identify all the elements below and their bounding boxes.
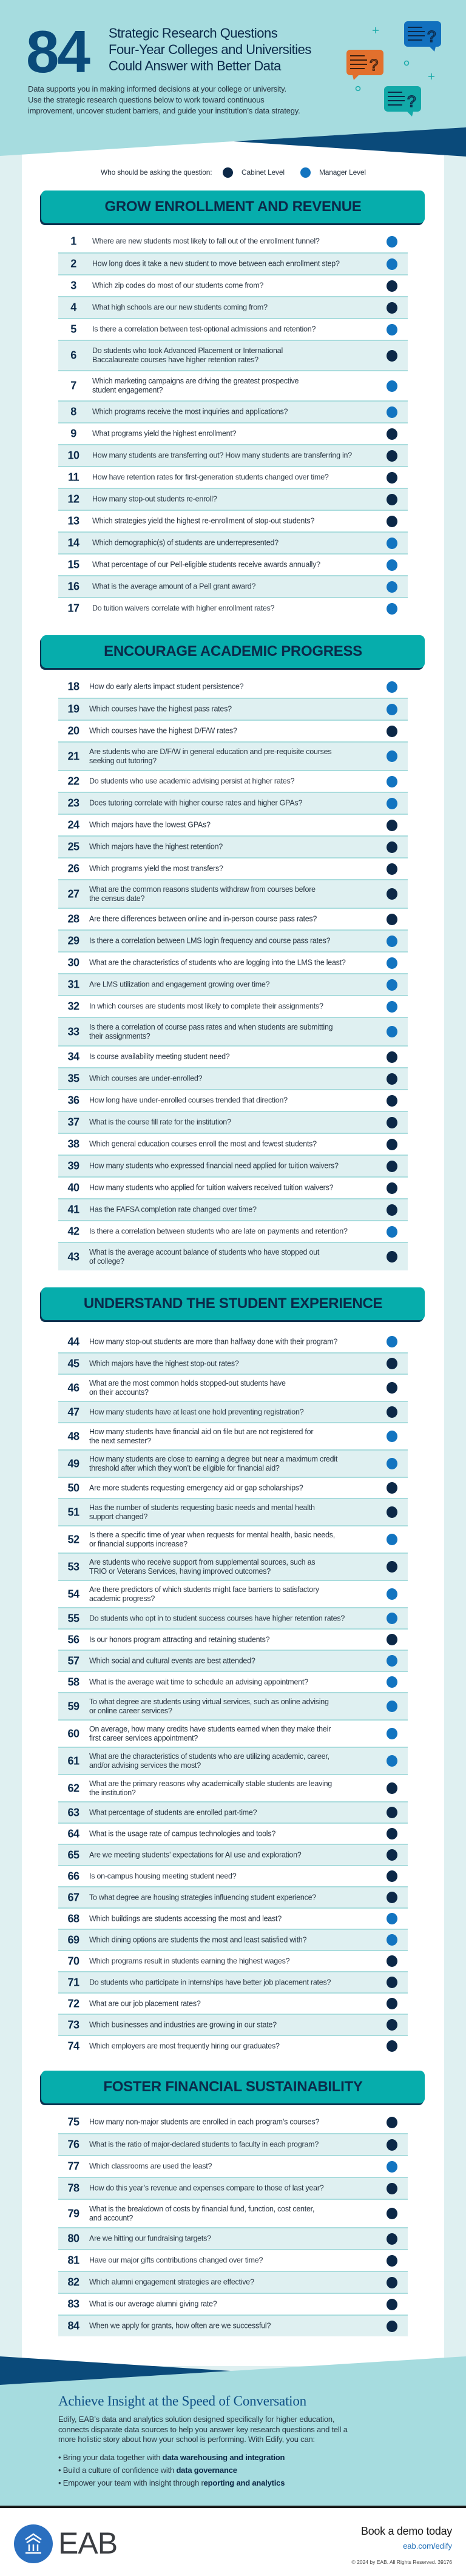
panel: enrollment questions: How long does it take a new student to move between each enrollment step? bbox=[92, 260, 340, 268]
panel: academic progress questions: Are there differences between online and in-person course pass rates? bbox=[89, 915, 317, 923]
intro paragraph: improvement, uncover student barriers, and guide your institution’s data strategy. bbox=[28, 106, 300, 115]
callout paragraph: connects disparate data sources to help you answer key research questions and tell a bbox=[58, 2424, 348, 2434]
panel: student experience questions: threshold after which they won’t be eligible for financial aid? bbox=[89, 1463, 280, 1472]
panel: academic progress questions: their assignments? bbox=[89, 1031, 150, 1040]
heading: encourage academic progress: ENCOURAGE ACADEMIC PROGRESS bbox=[104, 643, 362, 659]
panel: enrollment questions: 4 bbox=[70, 301, 76, 313]
panel: student experience questions: What are our job placement rates? bbox=[89, 1999, 201, 2008]
panel: student experience questions: On average, how many credits have students earned when they make their bbox=[89, 1724, 331, 1733]
icon: speech bubbles: ? bbox=[427, 27, 436, 46]
panel: financial questions: When we apply for grants, how often are we successful? bbox=[89, 2321, 271, 2330]
panel: academic progress questions: 21 bbox=[67, 750, 79, 762]
panel: student experience questions: 67 bbox=[67, 1891, 79, 1903]
panel: student experience questions: Which majors have the highest stop-out rates? bbox=[89, 1359, 239, 1367]
panel: financial questions: 75 bbox=[67, 2116, 79, 2128]
title: Could Answer with Better Data bbox=[109, 58, 281, 73]
panel: academic progress questions: seeking out tutoring? bbox=[89, 756, 157, 764]
panel: academic progress questions: 41 bbox=[67, 1204, 79, 1216]
legend: Manager Level bbox=[319, 168, 366, 177]
panel: financial questions: How do this year’s revenue and expenses compare to those of last year? bbox=[89, 2184, 323, 2193]
panel: student experience questions: 68 bbox=[67, 1912, 79, 1924]
panel: financial questions: Are we hitting our fundraising targets? bbox=[89, 2234, 211, 2242]
panel: student experience questions: TRIO or Veterans Services, having improved outcomes? bbox=[89, 1566, 271, 1575]
callout paragraph: more holistic story about how your school is performing. With Edify, you can: bbox=[58, 2435, 315, 2444]
panel: academic progress questions: Which courses are under-enrolled? bbox=[89, 1074, 202, 1082]
panel: academic progress questions: Which majors have the highest retention? bbox=[89, 842, 223, 851]
panel: student experience questions: 58 bbox=[67, 1676, 79, 1688]
panel: enrollment questions: 11 bbox=[68, 471, 79, 483]
panel: academic progress questions: 19 bbox=[67, 703, 79, 715]
callout bullets: • Build a culture of confidence with data governance bbox=[58, 2466, 237, 2474]
panel: student experience questions: What are the most common holds stopped-out students have bbox=[89, 1378, 286, 1387]
panel: student experience questions: Which dining options are students the most and least satisfied with? bbox=[89, 1935, 306, 1944]
panel: student experience questions: What are the characteristics of students who are utilizing academic, career, bbox=[89, 1752, 329, 1761]
panel: student experience questions: What is the usage rate of campus technologies and tools? bbox=[89, 1829, 275, 1838]
panel: enrollment questions: 10 bbox=[67, 449, 79, 461]
panel: academic progress questions: 43 bbox=[67, 1250, 79, 1263]
panel: student experience questions: on their accounts? bbox=[89, 1388, 149, 1397]
panel: academic progress questions: 24 bbox=[67, 819, 79, 831]
panel: student experience questions: 60 bbox=[67, 1727, 79, 1739]
panel: academic progress questions: 42 bbox=[67, 1226, 79, 1238]
panel: enrollment questions: student engagement? bbox=[92, 386, 163, 394]
panel: student experience questions: 73 bbox=[67, 2018, 79, 2031]
panel: enrollment questions: 3 bbox=[70, 279, 76, 291]
panel: financial questions: 79 bbox=[67, 2207, 79, 2219]
panel: academic progress questions: Is course availability meeting student need? bbox=[89, 1052, 230, 1060]
panel: academic progress questions: How long have under-enrolled courses trended that direction? bbox=[89, 1096, 288, 1104]
panel: academic progress questions: 30 bbox=[67, 956, 79, 968]
panel: student experience questions: Are more students requesting emergency aid or gap scholarships? bbox=[89, 1483, 303, 1492]
panel: academic progress questions: 35 bbox=[67, 1073, 79, 1085]
panel: student experience questions: first career services appointment? bbox=[89, 1734, 198, 1742]
panel: financial questions: 82 bbox=[67, 2276, 79, 2288]
panel: academic progress questions: 20 bbox=[67, 724, 79, 737]
panel: student experience questions: Are we meeting students’ expectations for AI use and exploration? bbox=[89, 1850, 301, 1859]
panel: academic progress questions: 23 bbox=[67, 797, 79, 809]
panel: academic progress questions: What are the characteristics of students who are logging into the LMS the least? bbox=[89, 959, 346, 967]
call to action: Book a demo today bbox=[361, 2525, 452, 2537]
panel: academic progress questions: Is there a correlation between LMS login frequency and course pass rates? bbox=[89, 937, 330, 945]
intro paragraph bbox=[28, 84, 300, 115]
legend bbox=[101, 167, 366, 178]
panel: student experience questions: 64 bbox=[67, 1827, 79, 1839]
callout bullets: • Bring your data together with data warehousing and integration bbox=[58, 2452, 285, 2462]
panel: student experience questions: Is there a specific time of year when requests for mental health, basic needs, bbox=[89, 1530, 335, 1539]
callout paragraph: Edify, EAB’s data and analytics solution designed specifically for higher education, bbox=[58, 2415, 334, 2424]
panel: enrollment questions: Which programs receive the most inquiries and applications? bbox=[92, 408, 288, 416]
panel: academic progress questions: Which majors have the lowest GPAs? bbox=[89, 820, 211, 829]
panel: student experience questions: 50 bbox=[67, 1482, 79, 1494]
heading: understand the student experience bbox=[41, 1287, 425, 1320]
panel: academic progress questions: 37 bbox=[67, 1116, 79, 1128]
big number 84: 84 bbox=[26, 18, 89, 85]
panel: enrollment questions: 1 bbox=[70, 235, 76, 248]
panel: academic progress questions: Has the FAFSA completion rate changed over time? bbox=[89, 1205, 257, 1213]
panel: academic progress questions: 18 bbox=[67, 681, 79, 693]
panel: enrollment questions: 6 bbox=[70, 349, 76, 362]
panel: academic progress questions: the census date? bbox=[89, 894, 144, 903]
panel: enrollment questions bbox=[58, 235, 408, 615]
panel: academic progress questions: In which courses are students most likely to complete their assignments? bbox=[89, 1002, 323, 1011]
panel: student experience questions: Which buildings are students accessing the most and least? bbox=[89, 1914, 282, 1923]
panel: academic progress questions: 26 bbox=[67, 863, 79, 875]
panel: financial questions: and account? bbox=[89, 2213, 133, 2222]
panel: student experience questions: 62 bbox=[67, 1782, 79, 1794]
panel: enrollment questions: 7 bbox=[70, 380, 76, 392]
panel: academic progress questions: 33 bbox=[67, 1025, 79, 1037]
panel: student experience questions: Are students who receive support from supplemental sources, such as bbox=[89, 1558, 315, 1566]
panel: enrollment questions: 5 bbox=[70, 323, 76, 335]
legend: Who should be asking the question: bbox=[101, 168, 212, 177]
panel: academic progress questions: Which courses have the highest pass rates? bbox=[89, 705, 232, 713]
call to action: eab.com/edify bbox=[403, 2541, 452, 2551]
panel: enrollment questions: 9 bbox=[70, 427, 76, 439]
title: Four-Year Colleges and Universities bbox=[109, 42, 311, 57]
title: Strategic Research Questions bbox=[109, 25, 277, 41]
panel: enrollment questions: Do students who took Advanced Placement or International bbox=[92, 346, 283, 355]
panel: student experience questions: 61 bbox=[67, 1755, 79, 1767]
panel: academic progress questions: 22 bbox=[67, 775, 79, 787]
panel: student experience questions: 44 bbox=[67, 1335, 79, 1347]
panel: student experience questions: Which businesses and industries are growing in our state? bbox=[89, 2020, 277, 2029]
panel: student experience questions: What are the primary reasons why academically stable students are leaving bbox=[89, 1779, 332, 1787]
panel: academic progress questions: Do students who use academic advising persist at higher rates? bbox=[89, 777, 294, 785]
panel: enrollment questions: 17 bbox=[67, 602, 79, 614]
panel: student experience questions: 49 bbox=[67, 1457, 79, 1469]
logo: EAB bbox=[14, 2524, 117, 2563]
panel: student experience questions: Which employers are most frequently hiring our graduates? bbox=[89, 2042, 280, 2050]
icon: speech bubbles: ? bbox=[407, 92, 416, 110]
panel: enrollment questions: 2 bbox=[70, 257, 76, 269]
panel: student experience questions: the next semester? bbox=[89, 1437, 151, 1445]
panel: academic progress questions: Are students who are D/F/W in general education and pre-requisite courses bbox=[89, 747, 331, 756]
panel: academic progress questions: What is the average account balance of students who have stopped out bbox=[89, 1247, 319, 1256]
panel: academic progress questions: 36 bbox=[67, 1094, 79, 1107]
heading: encourage academic progress bbox=[41, 635, 425, 668]
panel: student experience questions: Has the number of students requesting basic needs and mental health bbox=[89, 1503, 315, 1512]
panel: enrollment questions: 8 bbox=[70, 405, 76, 417]
panel: financial questions: Which alumni engagement strategies are effective? bbox=[89, 2278, 254, 2286]
panel: academic progress questions: of college? bbox=[89, 1257, 124, 1266]
panel: student experience questions: How many stop-out students are more than halfway done with their program? bbox=[89, 1337, 337, 1346]
callout bullets: • Empower your team with insight through reporting and analytics bbox=[58, 2478, 285, 2487]
legend: Cabinet Level bbox=[241, 168, 285, 177]
panel: student experience questions: 70 bbox=[67, 1955, 79, 1967]
panel: financial questions: 76 bbox=[67, 2138, 79, 2150]
panel: student experience questions: support changed? bbox=[89, 1512, 147, 1520]
panel: academic progress questions: 28 bbox=[67, 912, 79, 925]
panel: enrollment questions: 15 bbox=[67, 558, 79, 570]
white content panel bbox=[22, 121, 444, 2366]
panel: financial questions: 80 bbox=[67, 2233, 79, 2245]
panel: enrollment questions: How many stop-out students re-enroll? bbox=[92, 495, 217, 504]
panel: enrollment questions: How have retention rates for first-generation students changed over time? bbox=[92, 473, 329, 482]
panel: academic progress questions: 32 bbox=[67, 1000, 79, 1012]
panel: enrollment questions: 12 bbox=[67, 493, 79, 505]
panel: financial questions: Which classrooms are used the least? bbox=[89, 2162, 212, 2171]
panel: enrollment questions: 14 bbox=[67, 536, 79, 548]
heading: grow enrollment and revenue: GROW ENROLLMENT AND REVENUE bbox=[104, 198, 362, 215]
panel: academic progress questions: Are LMS utilization and engagement growing over time? bbox=[89, 980, 269, 989]
panel: student experience questions: Which social and cultural events are best attended? bbox=[89, 1656, 255, 1665]
footer white band bbox=[0, 2508, 466, 2576]
panel: academic progress questions: Which programs yield the most transfers? bbox=[89, 864, 223, 872]
heading: foster financial sustainability: FOSTER FINANCIAL SUSTAINABILITY bbox=[103, 2079, 363, 2095]
panel: academic progress questions: 34 bbox=[67, 1051, 79, 1063]
panel: enrollment questions: Where are new students most likely to fall out of the enrollment funnel? bbox=[92, 237, 320, 245]
panel: financial questions: 81 bbox=[67, 2254, 79, 2267]
panel: enrollment questions: Do tuition waivers correlate with higher enrollment rates? bbox=[92, 604, 274, 613]
panel: student experience questions: Which programs result in students earning the highest wages? bbox=[89, 1957, 289, 1965]
panel: student experience questions: 71 bbox=[67, 1976, 79, 1988]
panel: student experience questions: What percentage of students are enrolled part-time? bbox=[89, 1808, 257, 1816]
panel: academic progress questions: How do early alerts impact student persistence? bbox=[89, 682, 243, 690]
panel: enrollment questions: Which zip codes do most of our students come from? bbox=[92, 282, 263, 290]
panel: financial questions: How many non-major students are enrolled in each program’s courses? bbox=[89, 2117, 319, 2126]
icon: speech bubbles: ? bbox=[370, 56, 378, 74]
panel: academic progress questions: 27 bbox=[67, 888, 79, 900]
panel: enrollment questions: What percentage of our Pell-eligible students receive awards annually? bbox=[92, 561, 320, 569]
panel: enrollment questions: Which demographic(s) of students are underrepresented? bbox=[92, 539, 279, 547]
panel: financial questions: 84 bbox=[67, 2320, 79, 2332]
title bbox=[109, 25, 311, 73]
callout paragraph bbox=[58, 2415, 348, 2444]
panel: academic progress questions: 31 bbox=[67, 978, 79, 990]
logo: EAB: EAB bbox=[58, 2526, 117, 2560]
panel: student experience questions: 56 bbox=[67, 1633, 79, 1645]
panel: enrollment questions: What programs yield the highest enrollment? bbox=[92, 430, 236, 438]
callout bullets bbox=[58, 2452, 285, 2487]
panel: student experience questions: 69 bbox=[67, 1934, 79, 1946]
panel: enrollment questions: Baccalaureate courses have higher retention rates? bbox=[92, 356, 258, 364]
panel: financial questions: 77 bbox=[67, 2160, 79, 2172]
panel: student experience questions: or financial supports increase? bbox=[89, 1540, 187, 1548]
panel: student experience questions: 63 bbox=[67, 1806, 79, 1818]
panel: student experience questions: 72 bbox=[67, 1997, 79, 2009]
panel: student experience questions bbox=[58, 1335, 408, 2052]
panel: student experience questions: 55 bbox=[67, 1612, 79, 1624]
panel: student experience questions: 53 bbox=[67, 1560, 79, 1573]
intro paragraph: Use the strategic research questions below to work toward continuous bbox=[28, 95, 265, 104]
panel: student experience questions: 45 bbox=[67, 1357, 79, 1369]
panel: student experience questions: What is the average wait time to schedule an advising appointment? bbox=[89, 1677, 308, 1686]
panel: financial questions: What is the ratio of major-declared students to faculty in each program? bbox=[89, 2140, 319, 2149]
heading: foster financial sustainability bbox=[41, 2071, 425, 2103]
heading: understand the student experience: UNDERSTAND THE STUDENT EXPERIENCE bbox=[84, 1295, 382, 1312]
panel: student experience questions: 66 bbox=[67, 1870, 79, 1882]
panel: student experience questions: 57 bbox=[67, 1654, 79, 1667]
panel: academic progress questions: 29 bbox=[67, 934, 79, 946]
panel: academic progress questions: Is there a correlation between students who are late on payments and retention? bbox=[89, 1227, 348, 1235]
panel: student experience questions: Do students who opt in to student success courses have higher retention rates? bbox=[89, 1614, 345, 1622]
call to action bbox=[352, 2525, 453, 2565]
panel: student experience questions: 48 bbox=[67, 1430, 79, 1442]
panel: enrollment questions: What is the average amount of a Pell grant award? bbox=[92, 582, 255, 591]
panel: financial questions: 78 bbox=[67, 2182, 79, 2194]
panel: academic progress questions: Which general education courses enroll the most and fewest students? bbox=[89, 1139, 317, 1148]
panel: financial questions: What is the breakdown of costs by financial fund, function, cost center, bbox=[89, 2205, 314, 2213]
panel: academic progress questions: How many students who expressed financial need applied for tuition waivers? bbox=[89, 1161, 339, 1170]
panel: student experience questions: 46 bbox=[67, 1381, 79, 1394]
panel: financial questions bbox=[58, 2116, 408, 2336]
panel: student experience questions: Is our honors program attracting and retaining students? bbox=[89, 1635, 269, 1644]
panel: student experience questions: and/or advising services the most? bbox=[89, 1761, 201, 1769]
panel: academic progress questions bbox=[58, 681, 408, 1270]
panel: academic progress questions: Does tutoring correlate with higher course rates and higher GPAs? bbox=[89, 798, 302, 807]
panel: student experience questions: How many students have financial aid on file but are not registered for bbox=[89, 1427, 313, 1435]
icon: speech bubbles bbox=[346, 21, 441, 116]
panel: enrollment questions: Which strategies yield the highest re-enrollment of stop-out students? bbox=[92, 517, 314, 525]
intro paragraph: Data supports you in making informed decisions at your college or university. bbox=[28, 84, 286, 93]
panel: academic progress questions: Is there a correlation of course pass rates and when students are submitting bbox=[89, 1023, 333, 1031]
panel: student experience questions: To what degree are students using virtual services, such as online advising bbox=[89, 1698, 329, 1706]
panel: student experience questions: the institution? bbox=[89, 1789, 136, 1797]
panel: financial questions: 83 bbox=[67, 2298, 79, 2310]
panel: academic progress questions: How many students who applied for tuition waivers received tuition waivers? bbox=[89, 1183, 333, 1192]
callout heading: Achieve Insight at the Speed of Conversation bbox=[58, 2393, 306, 2409]
panel: enrollment questions: 16 bbox=[67, 580, 79, 592]
panel: enrollment questions: How many students are transferring out? How many students are transferring in? bbox=[92, 451, 352, 460]
panel: student experience questions: 54 bbox=[67, 1588, 79, 1600]
panel: academic progress questions: 40 bbox=[67, 1182, 79, 1194]
panel: enrollment questions: What high schools are our new students coming from? bbox=[92, 303, 268, 312]
panel: enrollment questions: Which marketing campaigns are driving the greatest prospective bbox=[92, 377, 299, 385]
panel: student experience questions: or online career services? bbox=[89, 1706, 172, 1715]
panel: student experience questions: Do students who participate in internships have better job placement rates? bbox=[89, 1978, 331, 1986]
panel: academic progress questions: Which courses have the highest D/F/W rates? bbox=[89, 727, 237, 735]
panel: academic progress questions: 39 bbox=[67, 1160, 79, 1172]
panel: student experience questions: How many students are close to earning a degree but near a maximum credit bbox=[89, 1455, 337, 1463]
panel: enrollment questions: 13 bbox=[67, 514, 79, 527]
panel: student experience questions: academic progress? bbox=[89, 1594, 155, 1603]
panel: student experience questions: How many students have at least one hold preventing registration? bbox=[89, 1408, 303, 1416]
panel: financial questions: Have our major gifts contributions changed over time? bbox=[89, 2256, 263, 2264]
panel: enrollment questions: Is there a correlation between test-optional admissions and retention? bbox=[92, 325, 316, 334]
header background bbox=[0, 0, 466, 157]
panel: student experience questions: 47 bbox=[67, 1406, 79, 1418]
panel: academic progress questions: 25 bbox=[67, 841, 79, 853]
panel: academic progress questions: 38 bbox=[67, 1138, 79, 1150]
panel: student experience questions: To what degree are housing strategies influencing student experience? bbox=[89, 1893, 316, 1901]
panel: student experience questions: 65 bbox=[67, 1849, 79, 1861]
heading: grow enrollment and revenue bbox=[41, 191, 425, 223]
callout: achieve insight bbox=[58, 2393, 348, 2487]
panel: financial questions: What is our average alumni giving rate? bbox=[89, 2299, 217, 2308]
footer background bbox=[0, 2356, 466, 2508]
panel: student experience questions: 74 bbox=[67, 2040, 79, 2052]
panel: academic progress questions: What is the course fill rate for the institution? bbox=[89, 1118, 231, 1126]
panel: student experience questions: 59 bbox=[67, 1700, 79, 1712]
panel: student experience questions: 51 bbox=[67, 1506, 79, 1518]
panel: academic progress questions: What are the common reasons students withdraw from courses before bbox=[89, 885, 316, 893]
panel: student experience questions: 52 bbox=[67, 1533, 79, 1545]
panel: student experience questions: Are there predictors of which students might face barriers to satisfactory bbox=[89, 1585, 319, 1593]
panel: student experience questions: Is on-campus housing meeting student need? bbox=[89, 1872, 236, 1880]
call to action: © 2024 by EAB. All Rights Reserved. 39176 bbox=[352, 2559, 452, 2565]
